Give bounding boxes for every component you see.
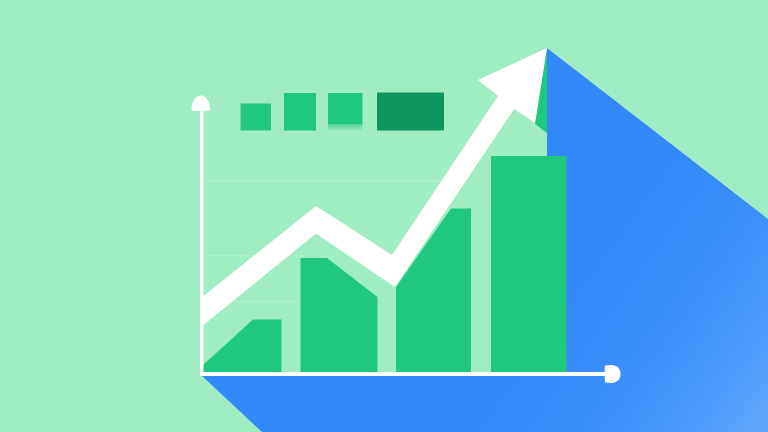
bar 1 xyxy=(203,320,282,372)
rising white arrow xyxy=(201,48,547,327)
legend squares xyxy=(240,92,444,131)
bar 3 xyxy=(396,208,471,372)
bar 4 xyxy=(491,156,566,372)
long blue shadow xyxy=(202,48,768,432)
bar 2 xyxy=(300,258,378,372)
legend square 3 xyxy=(328,93,362,131)
arrow green shadow sliver xyxy=(535,48,547,133)
x axis xyxy=(200,365,620,383)
bar chart xyxy=(203,156,566,372)
legend square 1 xyxy=(240,104,271,130)
legend dark rectangle xyxy=(377,92,444,130)
y axis xyxy=(192,96,210,376)
legend square 2 xyxy=(284,93,316,130)
